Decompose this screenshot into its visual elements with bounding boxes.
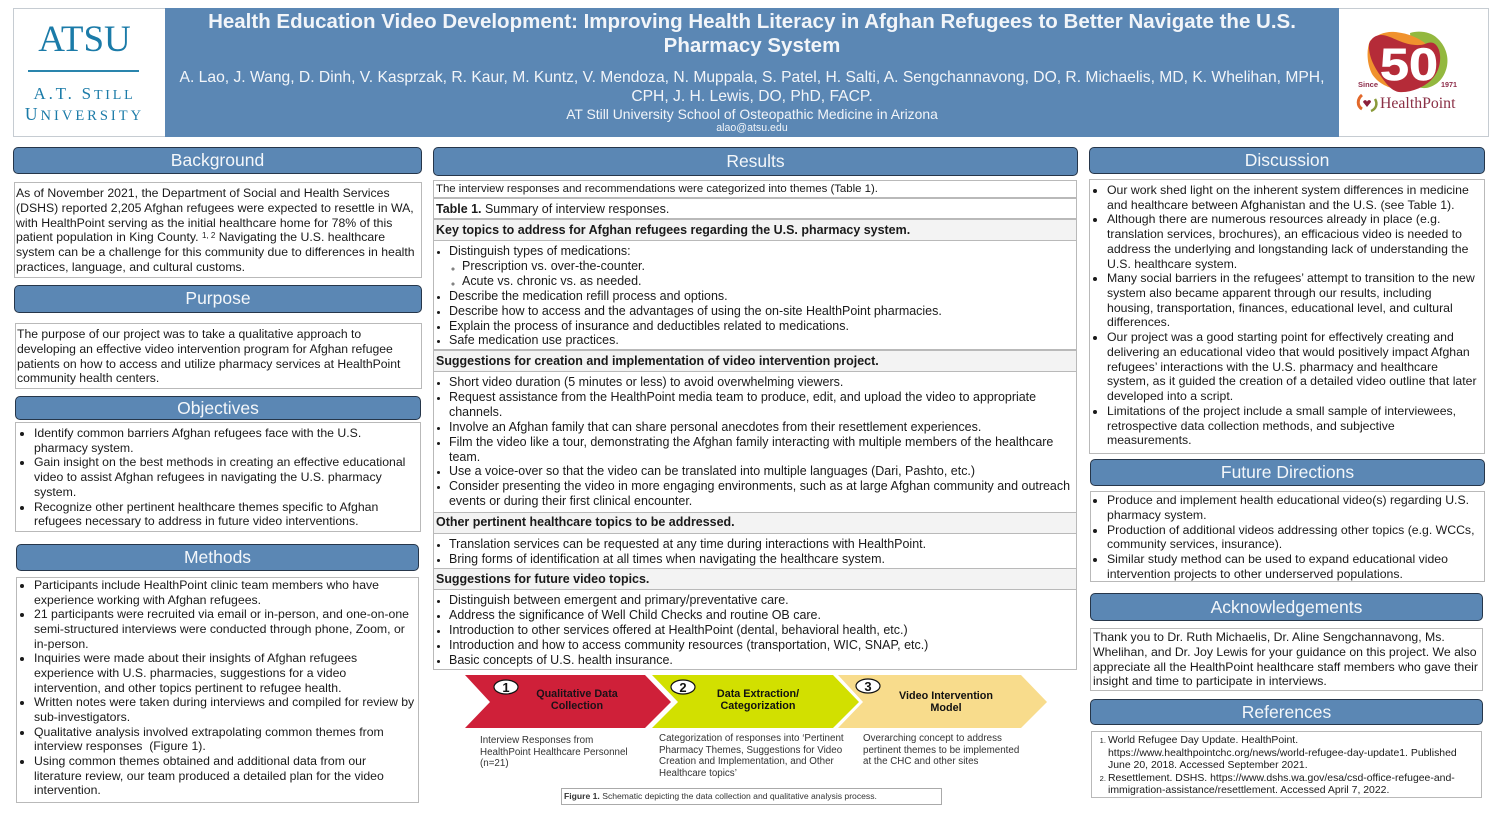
header banner bbox=[13, 8, 1489, 137]
panel: Background: practices, language, and cultural customs. bbox=[16, 260, 245, 274]
panel: Discussion: Our project was a good starting point for effectively creating and bbox=[1107, 330, 1454, 344]
panel: Background: with HealthPoint serving as the initial healthcare home for 78% of this bbox=[16, 216, 392, 230]
panel: Future Directions: pharmacy system. bbox=[1107, 508, 1207, 522]
panel: Discussion: system also became apparent through our results, including bbox=[1107, 286, 1432, 300]
panel: Acknowledgements bbox=[1090, 628, 1483, 691]
heading: Results bbox=[433, 147, 1078, 176]
panel: Discussion: Although there are numerous resources already in place (e.g. bbox=[1107, 212, 1440, 226]
list: other topics: Bring forms of identification at all times when navigating the healthcare system. bbox=[449, 552, 885, 566]
list: key topics bbox=[433, 240, 1077, 350]
chevron 2 bbox=[652, 675, 859, 728]
intro text bbox=[433, 180, 1077, 198]
panel: Background: system can be a challenge for this community due to differences in health bbox=[16, 245, 415, 259]
list: suggestions: Film the video like a tour, demonstrating the Afghan family interacting with multiple members of the healthcare bbox=[449, 435, 1053, 449]
list: suggestions: Involve an Afghan family that can share personal anecdotes from their resettlement experiences. bbox=[449, 420, 981, 434]
list: key topics: Describe how to access and the advantages of using the on-site HealthPoint pharmacies. bbox=[449, 304, 942, 318]
list: future topics: Distinguish between emergent and primary/preventative care. bbox=[449, 593, 789, 607]
heading: Background bbox=[13, 147, 422, 174]
logo: ATSU bbox=[25, 19, 144, 124]
heading: Objectives: Objectives bbox=[177, 398, 259, 418]
list: suggestions: team. bbox=[449, 450, 480, 464]
caption: step 3: Overarching concept to address bbox=[863, 733, 1002, 744]
panel: Discussion: housing, transportation, finances, educational level, and cultural bbox=[1107, 301, 1453, 315]
heading: Acknowledgements bbox=[1090, 593, 1483, 621]
heading: Purpose bbox=[14, 285, 422, 313]
list: future topics bbox=[433, 589, 1077, 670]
panel: Methods bbox=[16, 577, 419, 803]
heading: References: References bbox=[1242, 702, 1331, 722]
panel: Methods: semi-structured interviews were conducted through phone, Zoom, or bbox=[34, 622, 405, 636]
chevron 1: Qualitative Data bbox=[536, 688, 619, 700]
panel: Objectives: system. bbox=[34, 485, 76, 499]
figure caption bbox=[561, 788, 942, 805]
panel: Methods: interview responses (Figure 1). bbox=[34, 739, 206, 753]
list: future topics: Address the significance of Well Child Checks and routine OB care. bbox=[449, 608, 821, 622]
panel: Methods: Participants include HealthPoint clinic team members who have bbox=[34, 578, 379, 592]
list: key topics: Describe the medication refill process and options. bbox=[449, 289, 728, 303]
panel: Methods: Using common themes obtained and additional data from our bbox=[34, 754, 366, 768]
panel: Methods: sub-investigators. bbox=[34, 710, 130, 724]
caption: step 1: (n=21) bbox=[480, 758, 509, 769]
logo: ATSU: A.T. STILL bbox=[34, 84, 135, 103]
panel: Methods: experience working with Afghan refugees. bbox=[34, 593, 261, 607]
panel: Acknowledgements: Thank you to Dr. Ruth Michaelis, Dr. Aline Sengchannavong, Ms. bbox=[1093, 630, 1445, 644]
panel: Discussion: Limitations of the project include a small sample of interviewees, bbox=[1107, 404, 1456, 418]
table heading: suggestions bbox=[433, 350, 1077, 372]
table caption: Table 1. Summary of interview responses. bbox=[436, 202, 669, 216]
heading: Purpose: Purpose bbox=[185, 288, 251, 308]
panel: Discussion: and healthcare between Afghanistan and the U.S. (see Table 1). bbox=[1107, 198, 1455, 212]
panel: References: June 20, 2018. Accessed September 2021. bbox=[1108, 760, 1308, 771]
logo: ATSU: UNIVERSITY bbox=[25, 104, 144, 124]
panel: Objectives: Recognize other pertinent healthcare themes specific to Afghan bbox=[34, 500, 378, 514]
title: Pharmacy System bbox=[664, 34, 840, 57]
panel: Discussion: Many social barriers in the refugees’ attempt to transition to the new bbox=[1107, 271, 1475, 285]
chevron 1: 1 bbox=[502, 680, 510, 695]
panel: Discussion: address the underlying and longstanding lack of understanding the bbox=[1107, 242, 1468, 256]
panel: Results table bbox=[433, 180, 1077, 670]
heading: Background: Background bbox=[171, 150, 264, 170]
panel: Discussion: measurements. bbox=[1107, 433, 1192, 447]
affiliation: AT Still University School of Osteopathic Medicine in Arizona bbox=[566, 106, 938, 122]
panel: Purpose: The purpose of our project was to take a qualitative approach to bbox=[17, 327, 361, 341]
panel: References bbox=[1091, 731, 1482, 798]
caption: step 1 bbox=[480, 735, 628, 769]
heading: Methods: Methods bbox=[184, 547, 251, 567]
panel: Purpose: patients on how to access and utilize pharmacy services at HealthPoint bbox=[17, 356, 400, 370]
figure caption: Figure 1. Schematic depicting the data collection and qualitative analysis process. bbox=[564, 791, 877, 801]
chevron 3: Video Intervention bbox=[899, 690, 993, 702]
panel: Background: As of November 2021, the Department of Social and Health Services bbox=[16, 186, 390, 200]
table heading: key topics: Key topics to address for Afghan refugees regarding the U.S. pharmacy system. bbox=[436, 223, 910, 237]
panel: Methods: experience with U.S. pharmacies, suggestions for a video bbox=[34, 666, 346, 680]
list: other topics: Translation services can be requested at any time during interactions with HealthPoint. bbox=[449, 537, 926, 551]
panel: References: immigration-assistance/resettlement. Accessed April 7, 2022. bbox=[1108, 785, 1389, 796]
table heading: future topics bbox=[433, 568, 1077, 590]
panel: Future Directions bbox=[1090, 491, 1485, 582]
authors: A. Lao, J. Wang, D. Dinh, V. Kasprzak, R. Kaur, M. Kuntz, V. Mendoza, N. Muppala, S. Patel, H. Salti, A. Sengchannavong, DO, R. Michaelis, MD, K. Whelihan, MPH, bbox=[180, 69, 1324, 86]
panel: Methods: literature review, our team produced a detailed plan for the video bbox=[34, 769, 384, 783]
heading: Discussion bbox=[1089, 147, 1485, 174]
list: future topics: Introduction and how to access community resources (transportation, WIC, SNAP, etc.) bbox=[449, 638, 928, 652]
logo: HealthPoint 50 bbox=[1356, 32, 1457, 112]
panel: Future Directions: Production of additional videos addressing other topics (e.g. WCCs, bbox=[1107, 522, 1474, 536]
panel: Methods: intervention. bbox=[34, 783, 101, 797]
panel: Objectives: Identify common barriers Afghan refugees face with the U.S. bbox=[34, 426, 361, 440]
table heading: suggestions: Suggestions for creation and implementation of video intervention project. bbox=[436, 354, 879, 368]
caption: step 1: Interview Responses from bbox=[480, 735, 593, 746]
list: other topics bbox=[433, 533, 1077, 569]
heading: Future Directions: Future Directions bbox=[1221, 462, 1354, 482]
panel: References: Resettlement. DSHS. https://www.dshs.wa.gov/esa/csd-office-refugee-and- bbox=[1108, 773, 1455, 784]
heading: References bbox=[1090, 699, 1483, 725]
authors: CPH, J. H. Lewis, DO, PhD, FACP. bbox=[631, 88, 873, 105]
panel: Methods: Qualitative analysis involved extrapolating common themes from bbox=[34, 725, 384, 739]
authors bbox=[180, 69, 1324, 105]
table heading: key topics bbox=[433, 219, 1077, 241]
title bbox=[208, 10, 1296, 57]
table heading: other topics bbox=[433, 512, 1077, 534]
table caption bbox=[433, 198, 1077, 219]
chevron 2: 2 bbox=[679, 680, 687, 695]
list: suggestions: channels. bbox=[449, 405, 502, 419]
logo: HealthPoint 50: 1971 bbox=[1441, 82, 1457, 89]
panel: Discussion bbox=[1089, 179, 1485, 454]
panel: Discussion: developed into a script. bbox=[1107, 389, 1233, 403]
panel: Methods: intervention, and other topics pertinent to refugee health. bbox=[34, 681, 342, 695]
chevron 3: Model bbox=[930, 702, 962, 714]
logo: HealthPoint 50: 50 bbox=[1380, 39, 1438, 90]
heading: Results: Results bbox=[726, 151, 785, 171]
panel: Discussion: U.S. healthcare system. bbox=[1107, 257, 1237, 271]
chevron 3: 3 bbox=[864, 679, 872, 694]
chevron 3 bbox=[838, 675, 1047, 728]
list: suggestions: Short video duration (5 minutes or less) to avoid overwhelming viewers. bbox=[449, 375, 843, 389]
panel: Purpose bbox=[15, 323, 422, 389]
panel: Future Directions: Produce and implement health educational video(s) regarding U.S. bbox=[1107, 493, 1469, 507]
panel: Future Directions: Similar study method can be used to expand educational video bbox=[1107, 552, 1448, 566]
panel: Discussion: translation services, brochures), an efficacious video is needed to bbox=[1107, 227, 1462, 241]
list: key topics: Prescription vs. over-the-counter. bbox=[462, 259, 645, 273]
list: key topics: Acute vs. chronic vs. as needed. bbox=[462, 274, 642, 288]
panel: Purpose: developing an effective video intervention program for Afghan refugee bbox=[17, 342, 393, 356]
panel: Objectives: pharmacy system. bbox=[34, 441, 134, 455]
panel: Objectives: refugees necessary to address in future video interventions. bbox=[34, 514, 359, 528]
panel: References: https://www.healthpointchc.org/news/world-refugee-day-update1. Published bbox=[1108, 748, 1457, 759]
figure: process chevrons bbox=[465, 675, 1047, 728]
list: future topics: Introduction to other services offered at HealthPoint (dental, behavioral health, etc.) bbox=[449, 623, 908, 637]
title block bbox=[165, 8, 1339, 137]
caption: step 3 bbox=[863, 733, 1019, 767]
list: suggestions: Request assistance from the HealthPoint media team to produce, edit, and upload the video to appropriate bbox=[449, 390, 1036, 404]
caption: step 2: Healthcare topics’ bbox=[659, 768, 737, 779]
caption: step 3: at the CHC and other sites bbox=[863, 756, 978, 767]
list: key topics: Distinguish types of medications: bbox=[449, 244, 631, 258]
panel: Background: patient population in King County. 1, 2 Navigating the U.S. healthcare bbox=[16, 230, 385, 244]
list: suggestions: Consider presenting the video in more engaging environments, such as at large Afghan community and outreach bbox=[449, 479, 1070, 493]
caption: step 1: HealthPoint Healthcare Personnel bbox=[480, 747, 628, 758]
caption: step 2: Creation and Implementation, and Other bbox=[659, 756, 834, 767]
panel: Background bbox=[14, 182, 422, 278]
panel: Methods: in-person. bbox=[34, 637, 89, 651]
panel: Acknowledgements: Whelihan, and Dr. Joy Lewis for your guidance on this project. We also bbox=[1093, 645, 1477, 659]
panel: Discussion: retrospective data collection methods, and subjective bbox=[1107, 418, 1395, 432]
panel: Discussion: refugees’ interactions with the U.S. pharmacy and healthcare bbox=[1107, 360, 1438, 374]
list: key topics: Safe medication use practices. bbox=[449, 333, 619, 347]
heading: Objectives bbox=[15, 396, 421, 420]
chevron 2: Categorization bbox=[721, 700, 795, 712]
panel: Acknowledgements: insight and time to participate in interviews. bbox=[1093, 674, 1327, 688]
panel: Discussion: Our work shed light on the inherent system differences in medicine bbox=[1107, 183, 1469, 197]
chevron 1: Collection bbox=[551, 700, 603, 712]
caption: step 3: pertinent themes to be implemented bbox=[863, 745, 1019, 756]
table heading: other topics: Other pertinent healthcare topics to be addressed. bbox=[436, 515, 735, 529]
list: suggestions: Use a voice-over so that the video can be translated into multiple languages (Dari, Pashto, etc.) bbox=[449, 464, 975, 478]
panel: Methods: 21 participants were recruited via email or in-person, and one-on-one bbox=[34, 607, 409, 621]
chevron 2: Data Extraction/ bbox=[717, 688, 799, 700]
panel: Discussion: delivering an educational video that would positively impact Afghan bbox=[1107, 345, 1470, 359]
panel: Methods: Written notes were taken during interviews and compiled for review by bbox=[34, 695, 414, 709]
list: key topics: Explain the process of insurance and deductibles related to medications. bbox=[449, 319, 849, 333]
email: alao@atsu.edu bbox=[716, 122, 788, 134]
table heading: future topics: Suggestions for future video topics. bbox=[436, 572, 649, 586]
panel: Discussion: system, as it guided the creation of a detailed video outline that later bbox=[1107, 374, 1477, 388]
intro text: The interview responses and recommendations were categorized into themes (Table 1). bbox=[436, 183, 878, 195]
panel: References: World Refugee Day Update. HealthPoint. bbox=[1108, 735, 1298, 746]
panel: Future Directions: community services, insurance). bbox=[1107, 537, 1282, 551]
panel: Objectives: Gain insight on the best methods in creating an effective educational bbox=[34, 455, 405, 469]
logo: ATSU: ATSU bbox=[38, 19, 131, 60]
list: future topics: Basic concepts of U.S. health insurance. bbox=[449, 653, 673, 667]
heading: Methods bbox=[16, 544, 419, 571]
caption: step 2: Categorization of responses into ‘Pertinent bbox=[659, 733, 844, 744]
panel: Objectives bbox=[15, 422, 421, 532]
panel: Future Directions: intervention projects to other underserved populations. bbox=[1107, 567, 1403, 581]
chevron 1 bbox=[465, 675, 671, 728]
caption: step 2 bbox=[659, 733, 844, 779]
panel: Objectives: video to assist Afghan refugees in navigating the U.S. pharmacy bbox=[34, 470, 382, 484]
panel: Discussion: differences. bbox=[1107, 315, 1170, 329]
heading: Acknowledgements: Acknowledgements bbox=[1211, 597, 1362, 617]
caption: step 2: Pharmacy Themes, Suggestions for Video bbox=[659, 745, 842, 756]
list: suggestions: events or during their first clinical encounter. bbox=[449, 494, 692, 508]
title: Health Education Video Development: Improving Health Literacy in Afghan Refugees to Better Navigate the U.S. bbox=[208, 10, 1296, 33]
heading: Future Directions bbox=[1090, 459, 1485, 486]
logo: HealthPoint 50: HealthPoint bbox=[1380, 95, 1456, 112]
logo: HealthPoint 50: Since bbox=[1358, 82, 1378, 89]
panel: Purpose: community health centers. bbox=[17, 371, 159, 385]
panel: Acknowledgements: appreciate all the HealthPoint healthcare staff members who gave their bbox=[1093, 660, 1478, 674]
list: suggestions bbox=[433, 371, 1077, 513]
panel: Background: (DSHS) reported 2,205 Afghan refugees were expected to resettle in WA, bbox=[16, 201, 414, 215]
panel: Methods: Inquiries were made about their insights of Afghan refugees bbox=[34, 651, 357, 665]
heading: Discussion: Discussion bbox=[1245, 150, 1329, 170]
